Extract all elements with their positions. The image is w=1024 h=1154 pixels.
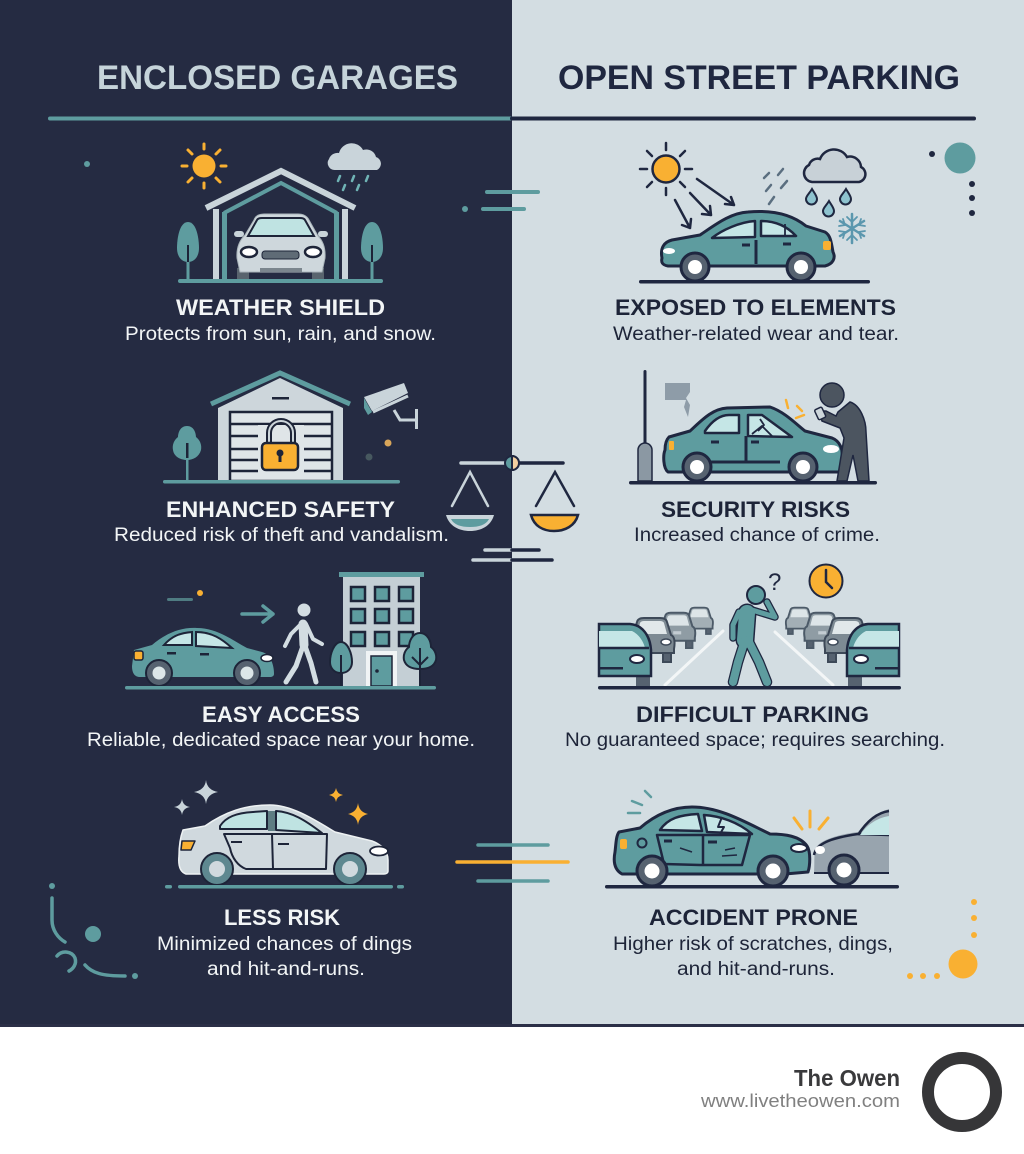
trees <box>177 222 383 280</box>
roof <box>211 373 350 404</box>
text: easy access: Reliable, dedicated space near your home. <box>87 730 475 751</box>
far parked car, right <box>786 608 813 634</box>
heading: enclosed garages: ENCLOSED GARAGES <box>97 59 458 97</box>
footer brand text: The Owen <box>794 1065 900 1091</box>
text: exposed to elements <box>613 295 899 345</box>
header rule <box>50 116 974 120</box>
text: enhanced safety <box>114 497 449 546</box>
front-view car <box>234 214 328 279</box>
walker <box>285 604 322 682</box>
text: less risk <box>157 905 412 980</box>
panel: open street parking background <box>512 0 1024 1024</box>
far parked car, left <box>686 608 713 634</box>
ground <box>163 480 400 484</box>
near car left <box>599 624 651 686</box>
decoration: center speed lines <box>457 845 568 881</box>
motion dash and dot <box>167 590 203 601</box>
text: accident prone <box>613 905 893 980</box>
decoration: top right dots <box>929 142 976 216</box>
text: enhanced safety: Reduced risk of theft and vandalism. <box>114 525 449 546</box>
text: accident prone: and hit-and-runs. <box>677 959 835 980</box>
question mark: ? <box>768 569 781 596</box>
impact burst <box>794 811 828 829</box>
teal sedan <box>661 211 834 281</box>
text: easy access: EASY ACCESS <box>202 702 360 727</box>
car <box>664 407 842 481</box>
text: exposed to elements: Weather-related wear and tear. <box>613 324 899 345</box>
ground <box>125 686 436 690</box>
rain dashes <box>764 169 787 204</box>
decoration: bottom left curves <box>49 883 138 979</box>
grey car <box>814 809 889 885</box>
dots <box>384 440 392 446</box>
sun <box>182 144 226 188</box>
cloud and rain <box>328 143 381 190</box>
snowflake <box>839 214 865 243</box>
heading: open street parking: OPEN STREET PARKING <box>558 59 960 97</box>
icon: searching for parking <box>598 564 901 690</box>
car body <box>179 805 388 885</box>
house <box>218 378 343 481</box>
icon: car break-in <box>629 370 877 484</box>
text: difficult parking <box>565 702 945 751</box>
icon: car, walker and apartment building <box>125 572 436 690</box>
ground <box>639 280 870 284</box>
footer divider <box>0 1024 1024 1027</box>
text: difficult parking: No guaranteed space; requires searching. <box>565 730 945 751</box>
text: security risks: Increased chance of crime. <box>634 525 880 546</box>
text: accident prone: ACCIDENT PRONE <box>649 905 858 930</box>
garage door <box>230 412 332 481</box>
garage frame <box>206 171 355 279</box>
ground <box>178 279 383 283</box>
raindrops <box>806 189 851 216</box>
confused pedestrian <box>733 586 775 682</box>
text: less risk: and hit-and-runs. <box>207 959 365 980</box>
padlock <box>258 421 304 473</box>
icon: locked garage and security camera <box>163 373 418 484</box>
sun and rays <box>640 143 734 228</box>
trees <box>330 633 436 686</box>
arrow <box>242 606 273 622</box>
teal car <box>614 807 810 886</box>
ground <box>605 885 899 888</box>
decoration: bottom right yellow dots <box>907 899 978 979</box>
clock <box>810 564 842 598</box>
middle parked car, right <box>804 613 840 648</box>
near parked car, left <box>629 618 675 662</box>
middle parked car, left <box>659 613 695 648</box>
thief <box>814 383 869 481</box>
near car right <box>847 624 899 686</box>
footer brand text <box>700 1065 900 1111</box>
ground <box>598 686 901 690</box>
icon: clean white car with sparkles <box>165 780 404 888</box>
near parked car, right <box>824 618 870 662</box>
icon: car exposed to sun, rain and snow <box>639 143 870 284</box>
footer logo <box>928 1058 996 1126</box>
decoration: top center dashes <box>84 161 538 212</box>
broken sign <box>665 383 690 417</box>
text: accident prone: Higher risk of scratches, dings, <box>613 934 893 955</box>
footer brand text: www.livetheowen.com <box>700 1091 900 1111</box>
text: security risks <box>634 497 880 546</box>
text: easy access <box>87 702 475 751</box>
text: weather shield: WEATHER SHIELD <box>176 295 385 320</box>
ground <box>165 885 404 888</box>
text: less risk: Minimized chances of dings <box>157 934 412 955</box>
sparks <box>786 400 804 418</box>
panel: enclosed garages background <box>0 0 512 1024</box>
text: difficult parking: DIFFICULT PARKING <box>636 702 869 727</box>
ground <box>629 481 877 484</box>
cloud <box>804 149 865 182</box>
text: security risks: SECURITY RISKS <box>661 497 850 522</box>
security camera <box>364 383 418 429</box>
road lines <box>665 631 833 685</box>
sparkles <box>174 780 368 825</box>
tree <box>173 426 201 481</box>
impact dashes <box>628 791 651 813</box>
text: weather shield <box>125 295 436 345</box>
icon: garage with car, sun and rain <box>177 143 383 283</box>
icon: balance scales on center divide <box>446 456 578 560</box>
text: less risk: LESS RISK <box>224 905 340 930</box>
icon: car collision <box>605 791 899 888</box>
car <box>132 628 274 686</box>
text: enhanced safety: ENHANCED SAFETY <box>166 497 395 522</box>
building <box>339 572 424 686</box>
text: exposed to elements: EXPOSED TO ELEMENTS <box>615 295 896 320</box>
lamp post <box>638 370 652 481</box>
text: weather shield: Protects from sun, rain, and snow. <box>125 324 436 345</box>
